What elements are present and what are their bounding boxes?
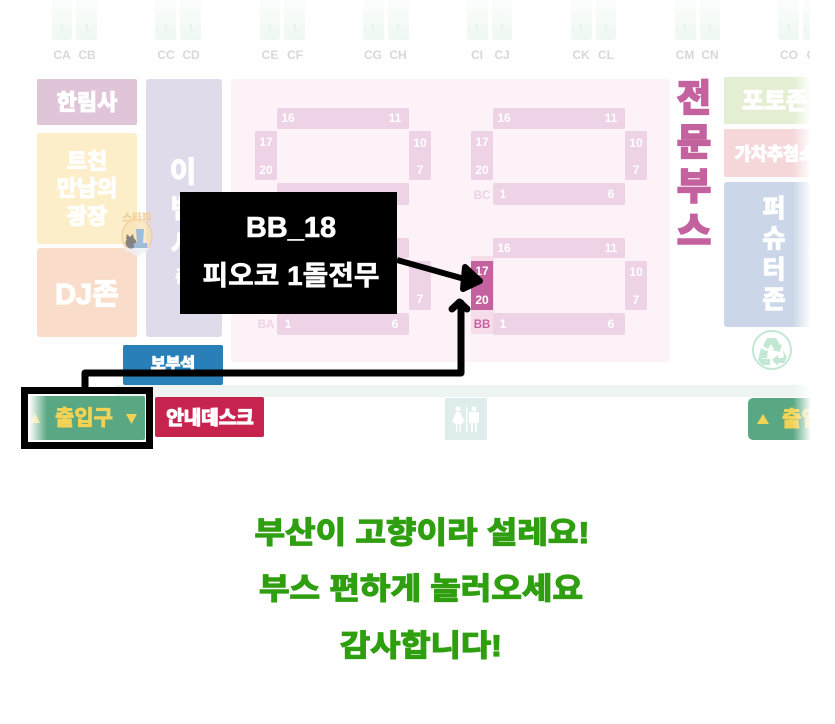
message text	[254, 517, 590, 663]
top stalls row: CF	[287, 48, 303, 62]
booth block BA: BA	[258, 319, 274, 331]
panel: left entrance: 출입구	[55, 407, 113, 430]
booth block BB with highlighted 17-20: 1	[500, 317, 507, 331]
top stalls row: 1	[499, 23, 505, 34]
message text: 부산이 고향이라 설레요!	[254, 517, 590, 550]
top stalls row: CK	[572, 48, 590, 62]
panel: 보부석	[123, 345, 223, 385]
top stalls row: CC	[157, 48, 175, 62]
top stalls row: CH	[389, 48, 407, 62]
top stalls row: CB	[78, 48, 96, 62]
icon: recycle	[753, 331, 791, 369]
top stalls row: 1	[163, 23, 169, 34]
message text: 감사합니다!	[340, 630, 502, 663]
booth block BD: 11	[389, 111, 402, 125]
top stalls row: C	[807, 48, 816, 62]
left fade on entrance	[29, 396, 47, 440]
top stalls row: 1	[59, 23, 65, 34]
map background	[10, 40, 810, 390]
panel: 가차추첨소: 가차추첨소	[735, 144, 815, 164]
booth block BB with highlighted 17-20	[471, 238, 647, 335]
top stalls row: 1	[292, 23, 298, 34]
panel: 한림사: 한림사	[57, 90, 117, 115]
top stalls row	[52, 0, 823, 62]
heading: 전문부스 vertical: 부	[677, 166, 711, 207]
booth block BB with highlighted 17-20: 16	[497, 241, 511, 255]
top stalls row: CG	[364, 48, 382, 62]
booth block BC: BC	[474, 190, 490, 202]
booth block BB with highlighted 17-20: 20	[475, 293, 489, 307]
booth block BD: 10	[413, 136, 427, 150]
booth block BA: 1	[285, 317, 292, 331]
panel: DJ존: DJ존	[55, 279, 119, 311]
booth block BC	[471, 108, 647, 205]
icon: mascot badge: 스타피	[123, 211, 151, 224]
entrance highlight frame	[24, 390, 150, 446]
booth block BB with highlighted 17-20: 6	[608, 317, 615, 331]
panel: 안내데스크	[155, 397, 264, 437]
booth block BA	[255, 238, 431, 335]
booth block BC: 1	[500, 187, 507, 201]
panel: right entrance	[748, 398, 835, 440]
panel: left entrance	[29, 396, 145, 440]
top stalls row: CI	[471, 48, 483, 62]
top stalls row: CM	[676, 48, 694, 62]
arrow: callout to booth	[397, 260, 480, 289]
booth block BB with highlighted 17-20: BB	[474, 319, 490, 331]
panel: 트친 만남의 광장: 광장	[67, 204, 107, 229]
panel: 트친 만남의 광장: 만남의	[57, 176, 117, 201]
heading: 전문부스 vertical: 문	[677, 122, 711, 163]
top stalls row: CO	[780, 48, 798, 62]
callout	[180, 192, 397, 314]
top stalls row: CA	[53, 48, 71, 62]
top stalls row: CL	[598, 48, 614, 62]
arrow: entrance to booth	[85, 302, 467, 390]
panel: 이벤트존: 존	[176, 269, 191, 286]
top stalls row: 1	[395, 23, 401, 34]
panel: 퍼슈터존: 존	[762, 286, 786, 314]
panel: 트친 만남의 광장: 트친	[67, 149, 107, 174]
top stalls row: 1	[682, 23, 688, 34]
booth block BA: 6	[392, 317, 399, 331]
booth block BA: 7	[417, 292, 424, 306]
icon: mascot badge	[122, 211, 152, 257]
booth block BB with highlighted 17-20: 10	[629, 265, 643, 279]
panel: DJ존	[37, 248, 137, 337]
booth block BC: 6	[608, 187, 615, 201]
booth block BC: 20	[475, 163, 489, 177]
panel: 트친 만남의 광장	[37, 133, 137, 244]
top stalls row: 1	[84, 23, 90, 34]
top stalls row: 1	[188, 23, 194, 34]
panel: 이벤트존: 시	[171, 230, 195, 260]
walkway strip	[115, 385, 815, 397]
panel: 포토존: 포토존	[742, 88, 808, 115]
panel: 가차추첨소	[724, 129, 824, 177]
top stalls row: 1	[578, 23, 584, 34]
top stalls row: 1	[474, 23, 480, 34]
booth block BB with highlighted 17-20: 11	[605, 241, 618, 255]
panel: 안내데스크: 안내데스크	[166, 407, 254, 429]
top stalls row: 1	[603, 23, 609, 34]
heading: 전문부스 vertical: 전	[677, 78, 711, 119]
top stalls row: 1	[707, 23, 713, 34]
booth block BC: 11	[605, 111, 618, 125]
top stalls row: CJ	[494, 48, 510, 62]
booth block BD: 17	[259, 135, 273, 149]
callout: 피오코 1돌전무	[202, 261, 380, 291]
booth block BB with highlighted 17-20: 17	[475, 264, 489, 278]
top stalls row: CE	[262, 48, 278, 62]
panel: 보부석: 보부석	[151, 355, 195, 373]
panel: 이벤트존	[146, 79, 222, 337]
panel: 퍼슈터존: 퍼	[762, 195, 786, 223]
icon: restroom	[445, 398, 487, 440]
booth block BD: 20	[259, 163, 273, 177]
panel: 이벤트존: 벤	[171, 194, 195, 224]
booth block BC: 16	[497, 111, 511, 125]
booth block BD: 16	[281, 111, 295, 125]
top stalls row: 1	[267, 23, 273, 34]
top stalls row: 1	[370, 23, 376, 34]
top stalls row: CD	[182, 48, 200, 62]
panel: 포토존	[724, 77, 824, 124]
callout: BB_18	[246, 212, 336, 244]
panel: 퍼슈터존: 터	[762, 256, 786, 284]
booth block BD	[255, 108, 431, 205]
panel: 이벤트존: 이	[170, 156, 196, 189]
top stalls row: 1	[786, 23, 792, 34]
panel: 퍼슈터존: 슈	[762, 225, 786, 253]
booth block BB with highlighted 17-20: 7	[633, 293, 640, 307]
booth block BD: 7	[417, 163, 424, 177]
heading: 전문부스 vertical	[677, 78, 711, 252]
panel: pink booth area	[231, 79, 670, 362]
top stalls row: CN	[701, 48, 719, 62]
message text: 부스 편하게 놀러오세요	[259, 573, 583, 606]
booth block BC: 7	[633, 163, 640, 177]
booth block BC: 10	[629, 136, 643, 150]
right fade	[793, 70, 811, 445]
heading: 전문부스 vertical: 스	[677, 211, 711, 252]
panel: 한림사	[37, 79, 137, 125]
booth block BC: 17	[475, 135, 489, 149]
panel: 퍼슈터존	[724, 182, 824, 327]
